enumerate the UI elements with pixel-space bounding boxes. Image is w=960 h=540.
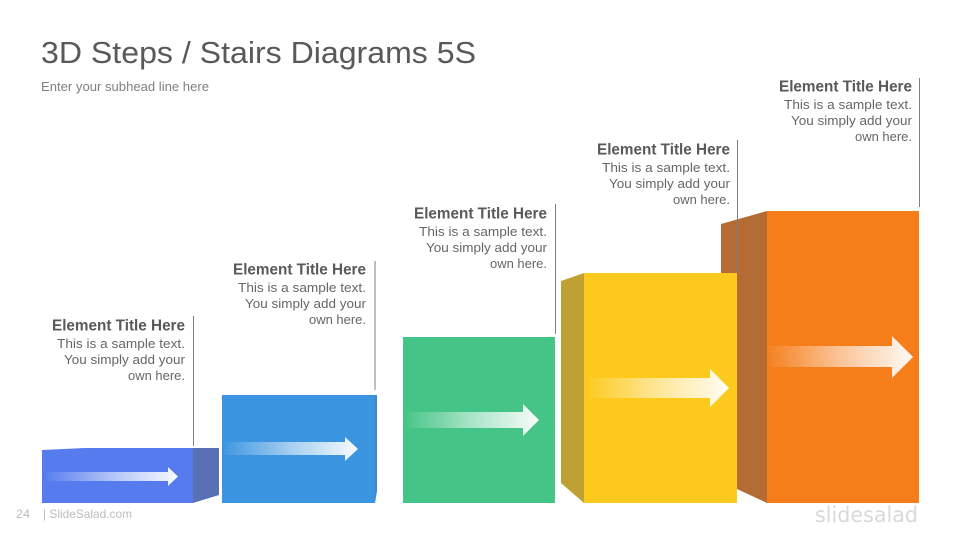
step 5 leader line: [918, 78, 920, 207]
step 4 text block: This is a sample text.: [602, 160, 730, 175]
step 3: green block: [403, 337, 555, 503]
step 4 arrow: [588, 369, 729, 407]
step 3 text block: own here.: [490, 256, 547, 271]
step 3 text block: This is a sample text.: [419, 224, 547, 239]
step 5 text block: own here.: [855, 129, 912, 144]
step 2 text block: Element Title Here: [233, 262, 366, 278]
step 4 text block: Element Title Here: [597, 142, 730, 158]
step 2 text block: You simply add your: [245, 296, 367, 311]
step 1 text block: Element Title Here: [52, 318, 185, 334]
footer logo wordmark: slidesalad: [815, 503, 918, 527]
step 3 text block: You simply add your: [426, 240, 548, 255]
step 1 side face: [193, 448, 219, 503]
step 3 arrow: [407, 404, 539, 436]
step 1: periwinkle block: [42, 448, 219, 503]
step 1 leader line: [192, 316, 194, 446]
step 5 side face: [721, 211, 767, 503]
step 4 front face: [584, 273, 737, 503]
step 4: yellow block: [561, 273, 737, 503]
step 2 arrow: [224, 437, 358, 461]
step 2 front face: [222, 395, 375, 503]
footer site name: | SlideSalad.com: [43, 507, 132, 521]
step 4 text block: [597, 142, 731, 207]
step 2 text block: [233, 262, 367, 327]
page number: 24: [16, 507, 30, 521]
step 4 leader line: [736, 140, 738, 273]
step 5 text block: [779, 78, 913, 144]
step 2 text block: own here.: [309, 312, 366, 327]
step 1 text block: You simply add your: [64, 352, 186, 367]
step 2 side face: [375, 395, 377, 503]
step 5 front face: [767, 211, 919, 503]
step 2 text block: This is a sample text.: [238, 280, 366, 295]
step 3 leader line: [554, 204, 556, 334]
step 1 arrow: [46, 467, 178, 486]
step 5: orange block: [721, 211, 919, 503]
step 5 text block: This is a sample text.: [784, 97, 912, 112]
step 3 text block: [414, 206, 548, 271]
step 1 text block: [52, 318, 186, 383]
step 5 text block: You simply add your: [791, 113, 913, 128]
step 1 front face: [42, 448, 193, 503]
step 5 text block: Element Title Here: [779, 78, 912, 96]
subhead: Enter your subhead line here: [41, 80, 209, 94]
step 3 text block: Element Title Here: [414, 206, 547, 222]
step 1 text block: own here.: [128, 368, 185, 383]
step 4 side face: [561, 273, 584, 503]
step 1 text block: This is a sample text.: [57, 336, 185, 351]
step 2: blue block: [222, 395, 377, 503]
step 5 arrow: [768, 336, 913, 378]
step 2 leader line: [374, 261, 376, 390]
title: 3D Steps / Stairs Diagrams 5S: [41, 35, 476, 70]
step 4 text block: You simply add your: [609, 176, 731, 191]
step 4 text block: own here.: [673, 192, 730, 207]
step 3 front face: [403, 337, 555, 503]
